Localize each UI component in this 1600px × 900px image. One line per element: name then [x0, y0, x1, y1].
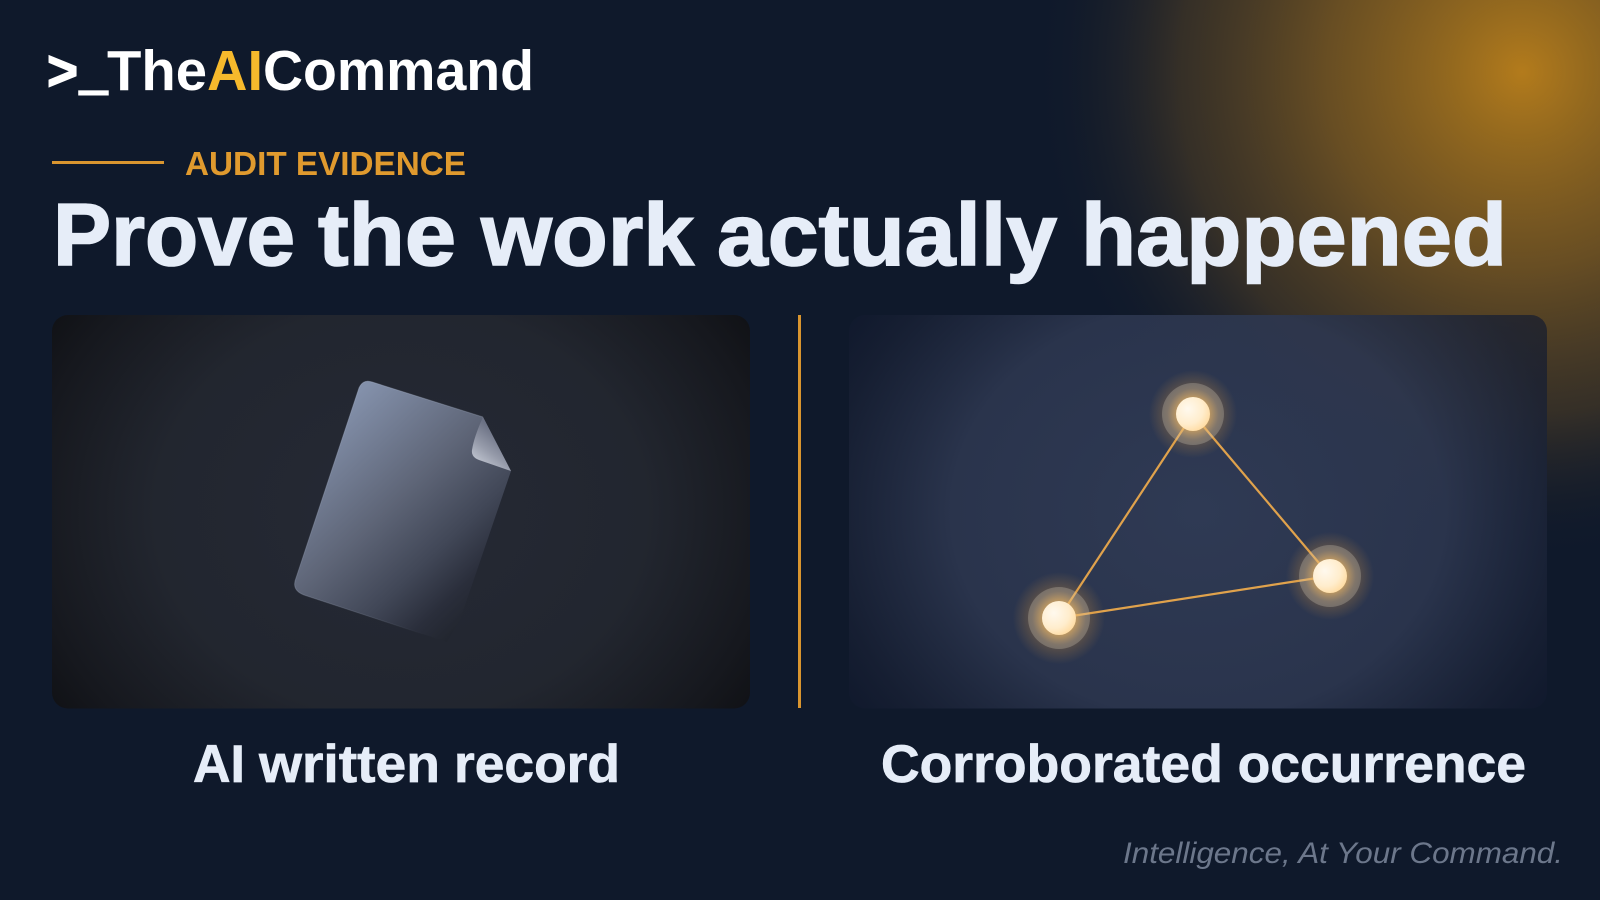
logo: TheAICommand: The	[107, 39, 207, 103]
icon: document with curled corner	[295, 381, 511, 642]
caption: left panel: record	[454, 735, 620, 794]
logo: TheAICommand	[47, 36, 534, 103]
title: Prove	[53, 185, 295, 284]
title: happened	[1081, 185, 1507, 284]
node: left	[1013, 572, 1105, 664]
logo: TheAICommand: AI	[207, 39, 263, 103]
node: top	[1149, 370, 1237, 458]
eyebrow: audit evidence: AUDIT EVIDENCE	[185, 145, 466, 182]
caption: right panel: Corroborated occurrence	[881, 735, 1526, 794]
network: three connected evidence nodes	[1013, 370, 1374, 664]
title	[53, 185, 1507, 284]
title: work	[480, 185, 695, 284]
caption: left panel: written	[258, 735, 440, 794]
logo: TheAICommand: _	[79, 36, 108, 100]
tagline: Intelligence, At Your Command.	[1123, 837, 1563, 870]
logo: TheAICommand: Command	[263, 39, 534, 103]
panel: corroborated occurrence	[849, 315, 1547, 708]
divider	[798, 315, 801, 708]
title: actually	[717, 185, 1057, 284]
panel: AI written record	[52, 315, 750, 708]
eyebrow: audit evidence	[52, 145, 466, 182]
caption: left panel: AI	[193, 735, 245, 794]
caption: left panel	[193, 735, 620, 794]
title: the	[318, 185, 456, 284]
node: right	[1286, 532, 1374, 620]
logo: TheAICommand: >	[47, 39, 78, 103]
